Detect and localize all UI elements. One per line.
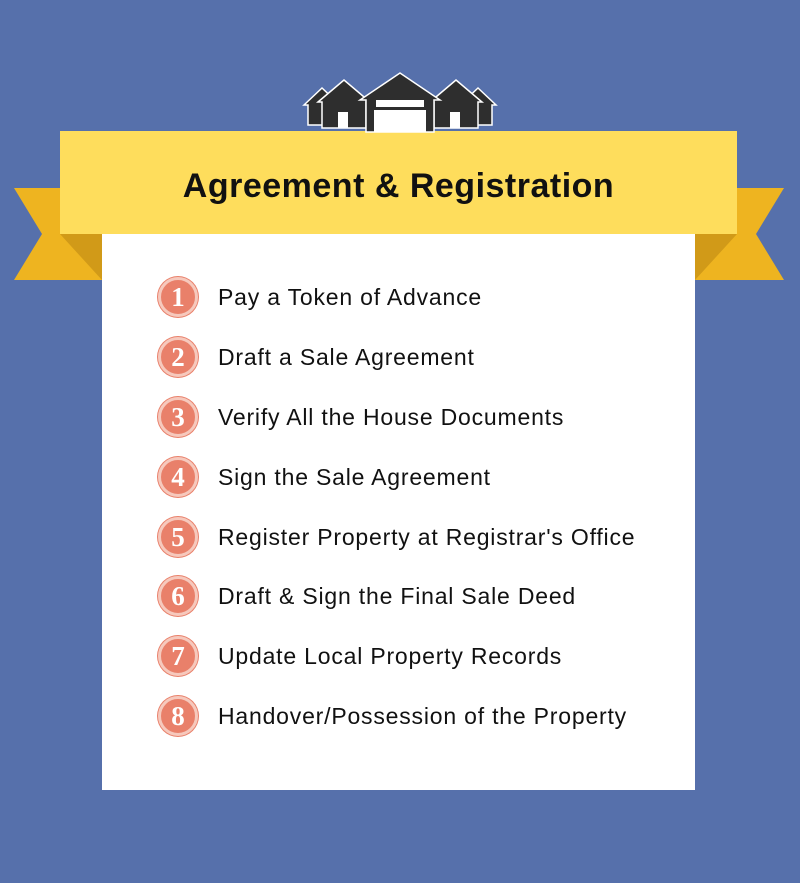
step 8: 8 <box>171 701 185 731</box>
step 1 <box>157 276 482 318</box>
icon: houses <box>302 72 498 133</box>
step 5: 5 <box>171 522 185 552</box>
title banner: Agreement & Registration <box>183 167 614 205</box>
left tail <box>14 188 102 280</box>
step 1: 1 <box>171 282 185 312</box>
step 6: 6 <box>171 581 185 611</box>
panel: steps <box>102 234 695 790</box>
step 7: 7 <box>171 641 185 671</box>
step 2: 2 <box>171 342 185 372</box>
title banner <box>60 131 737 234</box>
step 5 <box>157 516 635 558</box>
step 3: 3 <box>171 402 185 432</box>
step 7: Update Local Property Records <box>218 643 562 669</box>
step 4 <box>157 456 491 498</box>
step 2 <box>157 336 475 378</box>
step 8 <box>157 695 627 737</box>
step 1: Pay a Token of Advance <box>218 284 482 310</box>
step 4: 4 <box>171 462 185 492</box>
step 3: Verify All the House Documents <box>218 404 564 430</box>
step 7 <box>157 635 562 677</box>
step 5: Register Property at Registrar's Office <box>218 524 635 550</box>
right tail <box>695 188 784 280</box>
step 6: Draft & Sign the Final Sale Deed <box>218 583 576 609</box>
step 6 <box>157 575 576 617</box>
step 8: Handover/Possession of the Property <box>218 703 627 729</box>
step 4: Sign the Sale Agreement <box>218 464 491 490</box>
step 3 <box>157 396 564 438</box>
step 2: Draft a Sale Agreement <box>218 344 475 370</box>
